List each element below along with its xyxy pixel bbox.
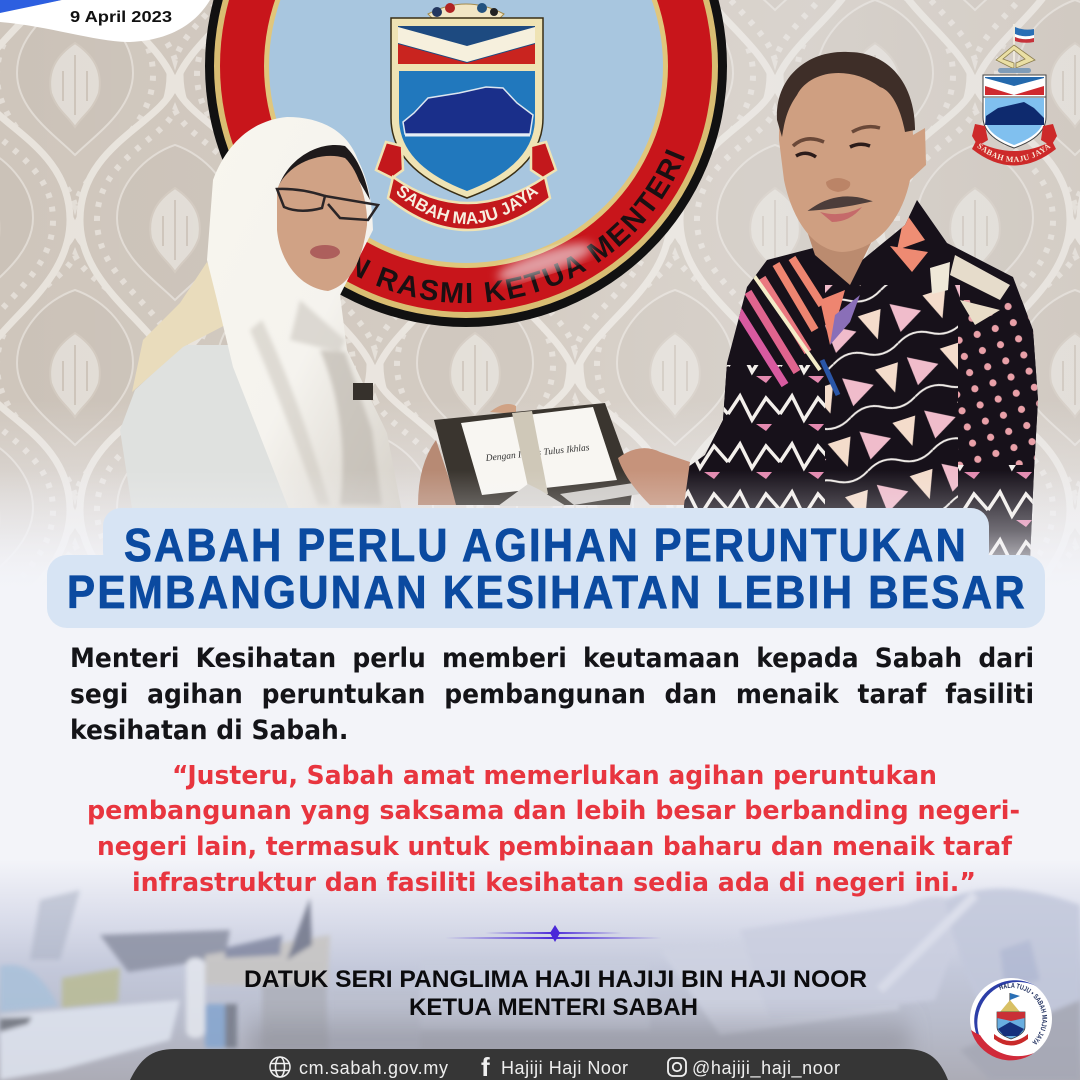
headline: SABAH PERLU AGIHAN PERUNTUKAN [124, 519, 968, 571]
woman's finger [490, 404, 516, 414]
website: cm.sabah.gov.my [299, 1058, 448, 1078]
crest on top of emblem shield [428, 3, 504, 18]
moustache [813, 198, 867, 209]
icon: instagram [668, 1058, 686, 1076]
footer bar [130, 1049, 948, 1080]
lower body background [0, 588, 1080, 1080]
emblem ribbon with motto: SABAH MAJU JAYA [396, 186, 539, 224]
icon: globe [270, 1057, 290, 1077]
uniform [120, 345, 300, 515]
emblem gloss highlight [494, 236, 596, 288]
name tag [353, 383, 373, 400]
attribution: DATUK SERI PANGLIMA HAJI HAJIJI BIN HAJI NOOR [244, 966, 867, 993]
chevron panel [983, 75, 1046, 97]
red quote: pembangunan yang saksama dan lebih besar berbanding negeri- [87, 796, 1020, 826]
logo blue crescent [974, 980, 1036, 1056]
head [779, 58, 926, 252]
fade overlay on people [0, 470, 1080, 590]
wallpaper background [0, 0, 1080, 640]
ribbon [512, 411, 548, 496]
emblem ring text: N RASMI KETUA MENTERI [356, 149, 685, 304]
motto ribbon: SABAH MAJU JAYA [977, 144, 1051, 162]
white card [461, 407, 617, 495]
red quote [87, 761, 1020, 898]
glasses [277, 189, 378, 220]
logo ring text: HALA TUJU • SABAH MAJU JAYA [998, 983, 1048, 1044]
date text: 9 April 2023 [70, 9, 172, 26]
cream shoulder collar [132, 262, 235, 392]
neck [805, 225, 875, 285]
under scarf [277, 145, 370, 200]
headline [67, 519, 1027, 618]
body paragraph: segi agihan peruntukan pembangunan dan menaik taraf fasiliti [70, 679, 1034, 710]
flag pole and flag [1013, 24, 1034, 70]
red quote: infrastruktur dan fasiliti kesihatan sedia ada di negeri ini.” [132, 868, 976, 898]
hijab [207, 117, 402, 512]
red quote: negeri lain, termasuk untuk pembinaan baharu dan menaik taraf [97, 832, 1013, 862]
arms holding flag [996, 45, 1035, 68]
round logo bottom right [970, 978, 1052, 1060]
hospital beds background photo [0, 860, 1080, 1080]
logo red crescent [971, 1030, 1034, 1060]
body paragraph: Menteri Kesihatan perlu memberi keutamaan kepada Sabah dari [70, 643, 1034, 674]
diamond divider [445, 925, 662, 942]
emblem ribbon with motto [374, 140, 558, 232]
batik shirt [680, 195, 1040, 565]
man's hand [618, 448, 690, 505]
Sabah coat of arms top right [972, 24, 1057, 166]
left bed [0, 1000, 180, 1080]
attribution: KETUA MENTERI SABAH [409, 994, 698, 1021]
motto ribbon [972, 124, 1057, 166]
mouth [310, 245, 340, 259]
centre panels [262, 985, 327, 1050]
crest band [998, 68, 1031, 73]
instagram handle: @hajiji_haji_noor [692, 1058, 840, 1079]
attribution [244, 966, 867, 1021]
man in batik shirt [680, 52, 1040, 565]
facebook name: Hajiji Haji Noor [501, 1058, 628, 1078]
body paragraph: kesihatan di Sabah. [70, 715, 348, 746]
emblem shield [391, 18, 543, 198]
headline background pills [47, 508, 1045, 628]
date tab with blue corner [0, 0, 210, 42]
face [277, 156, 367, 291]
red quote: “Justeru, Sabah amat memerlukan agihan peruntukan [172, 761, 937, 791]
hair [777, 52, 915, 137]
mouth [820, 207, 862, 222]
card script text: Dengan Ikhlas Tulus Ikhlas [484, 443, 590, 464]
gift box handed over [418, 403, 690, 506]
hijab shadow folds [250, 300, 382, 505]
logo mini shield [994, 993, 1028, 1046]
nose [826, 178, 850, 192]
woman in white hijab [120, 117, 402, 515]
eyebrows [793, 127, 880, 146]
shield [983, 97, 1046, 148]
body paragraph [70, 643, 1034, 746]
woman's hand [418, 440, 458, 505]
eyes [796, 144, 870, 157]
right beds [660, 925, 900, 1035]
dark box [434, 403, 634, 505]
round state emblem on the wall [205, 0, 727, 327]
